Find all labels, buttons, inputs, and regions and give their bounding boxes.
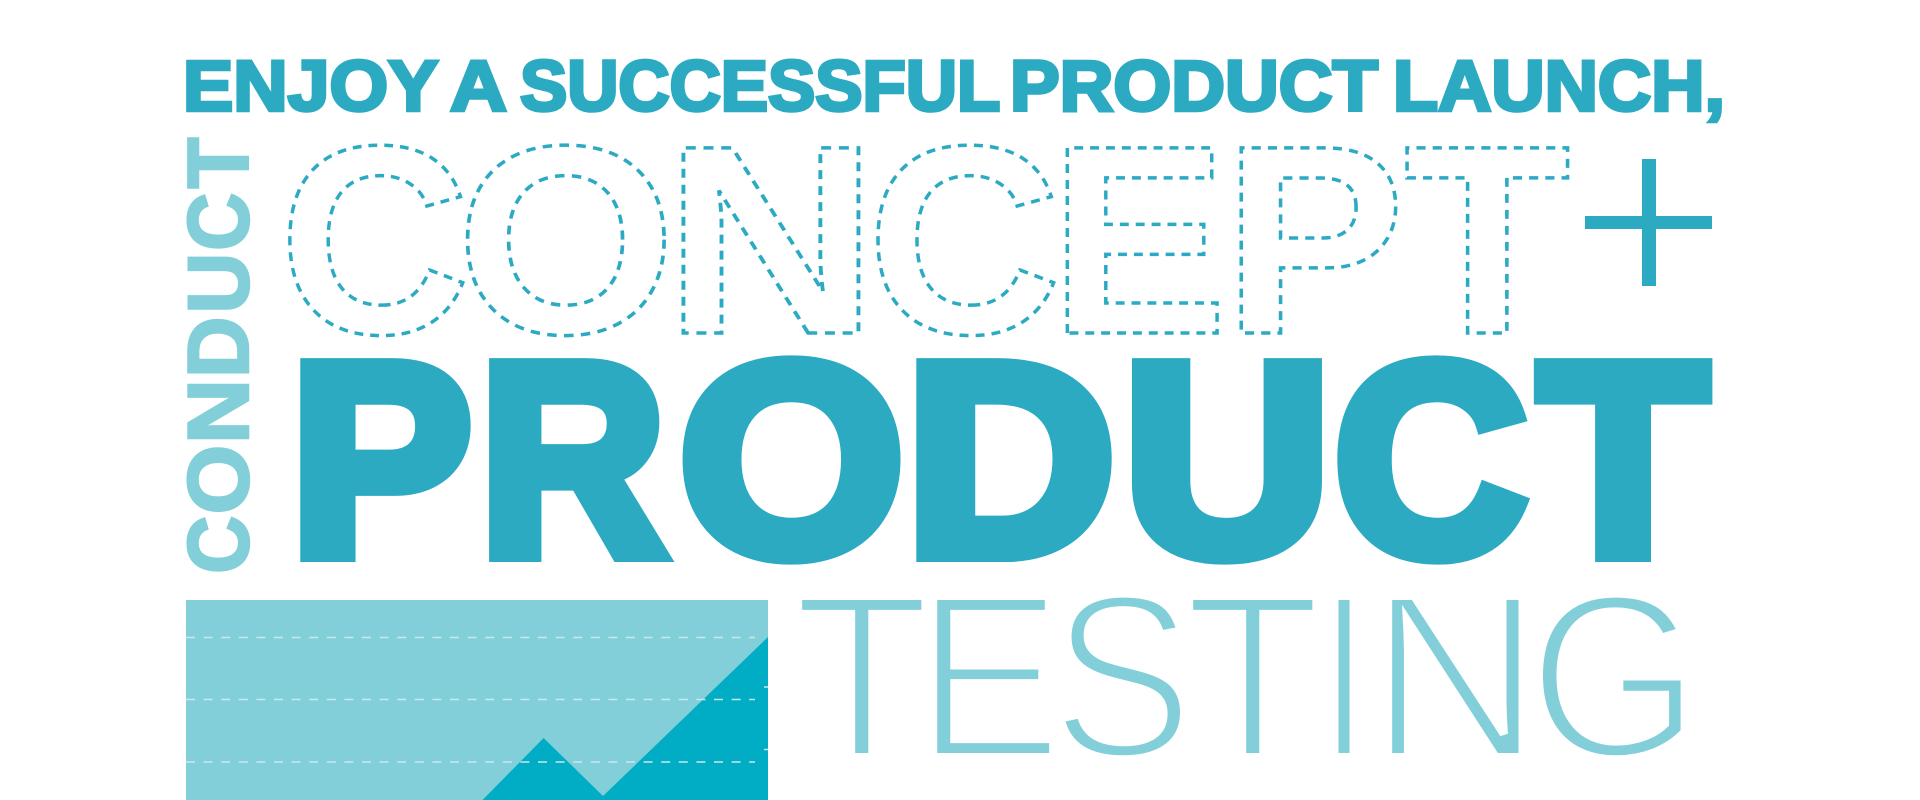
vertical word: conduct: T (171, 138, 267, 188)
big word: product: D (905, 307, 1115, 612)
dashed outline word: concept: C (867, 90, 1061, 391)
chart background panel (186, 600, 768, 800)
icon: plus sign (1585, 159, 1712, 286)
vertical word: conduct: N (171, 379, 267, 444)
heading: enjoy a successful product launch: PRODUCT (1010, 47, 1378, 126)
vertical word: conduct: D (171, 316, 267, 378)
word: testing: T (793, 545, 930, 800)
word: testing: T (1184, 545, 1321, 800)
heading: enjoy a successful product launch: LAUNCH, (1393, 47, 1725, 126)
word: testing: G (1528, 545, 1701, 800)
vertical word: conduct: C (171, 516, 267, 574)
dashed outline word: concept: E (1050, 90, 1228, 391)
big word: product: U (1123, 307, 1331, 612)
heading: enjoy a successful product launch: ENJOY (183, 47, 438, 126)
big word: product: P (290, 307, 472, 612)
word: testing: N (1368, 545, 1542, 800)
chart right edge ticks (764, 687, 768, 750)
dashed outline word: concept: C (279, 90, 470, 391)
big word: product: T (1539, 307, 1707, 612)
word: testing: I (1318, 545, 1370, 800)
big word: product: C (1334, 307, 1527, 612)
heading: enjoy a successful product launch: SUCCESSFUL (520, 47, 999, 126)
dashed outline word: concept: P (1223, 90, 1405, 391)
dashed outline word: concept: O (456, 90, 676, 391)
word: testing: E (915, 545, 1062, 800)
dashed outline word: concept: N (664, 90, 878, 391)
word: testing: S (1051, 545, 1193, 800)
vertical word: conduct: C (171, 193, 267, 251)
dashed outline word: concept: T (1404, 90, 1570, 391)
vertical word: conduct: U (171, 253, 267, 314)
chart rising area (482, 637, 768, 800)
chart dashed gridlines (186, 638, 755, 762)
big word: product: O (679, 307, 904, 612)
big word: product: R (479, 307, 666, 612)
heading: enjoy a successful product launch: A (450, 47, 506, 126)
chart: rising area graph (186, 600, 768, 800)
vertical word: conduct: O (171, 445, 267, 514)
